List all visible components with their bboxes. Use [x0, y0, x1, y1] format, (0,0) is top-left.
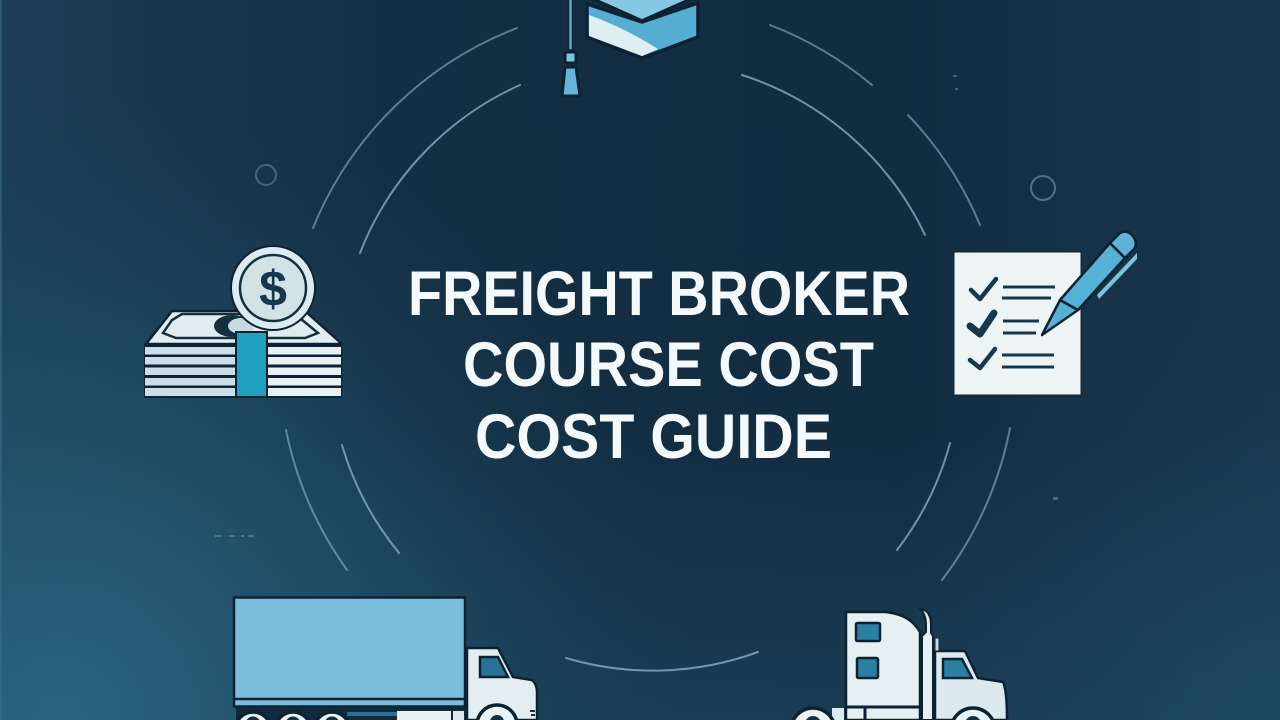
cap top: [586, 0, 698, 21]
title: COURSE COST: [463, 330, 874, 400]
pencil: [1042, 232, 1137, 335]
check marks: [970, 279, 996, 368]
bill layers: [145, 347, 237, 396]
title: FREIGHT BROKER: [408, 259, 910, 329]
icon: box truck: [234, 598, 537, 720]
truck hood: [935, 651, 1007, 720]
truck cargo box: [234, 598, 465, 706]
money band: [236, 332, 267, 397]
sleeper cab: [846, 612, 920, 720]
stack backing: [144, 344, 342, 398]
icon: checklist with pencil: [954, 232, 1137, 395]
cap body: [587, 3, 698, 58]
truck wheels: [791, 708, 995, 720]
decorative circle left: [256, 165, 276, 185]
truck wheels: [235, 705, 517, 720]
icon: money stack with coin: [144, 246, 342, 398]
decorative dots: [215, 75, 1058, 537]
title: COST GUIDE: [475, 402, 832, 472]
cap tassel: [562, 0, 580, 96]
title: [408, 259, 910, 472]
bill top: [146, 311, 342, 344]
sleeper windows: [856, 623, 880, 641]
exhaust stack: [920, 609, 933, 720]
icon: graduation cap: [562, 0, 698, 96]
truck chassis: [236, 706, 468, 720]
truck grille marks: [530, 710, 535, 716]
truck cab: [467, 648, 537, 720]
paper: [954, 252, 1081, 395]
icon: semi truck cab: [791, 609, 1007, 720]
coin: [231, 246, 315, 330]
checklist lines: [1002, 287, 1055, 367]
ring of arc segments: [286, 25, 1010, 671]
decorative circle right: [1031, 176, 1055, 200]
cap white band: [589, 15, 658, 56]
icon: money stack with coin: $: [259, 261, 287, 317]
truck chassis: [846, 706, 921, 708]
